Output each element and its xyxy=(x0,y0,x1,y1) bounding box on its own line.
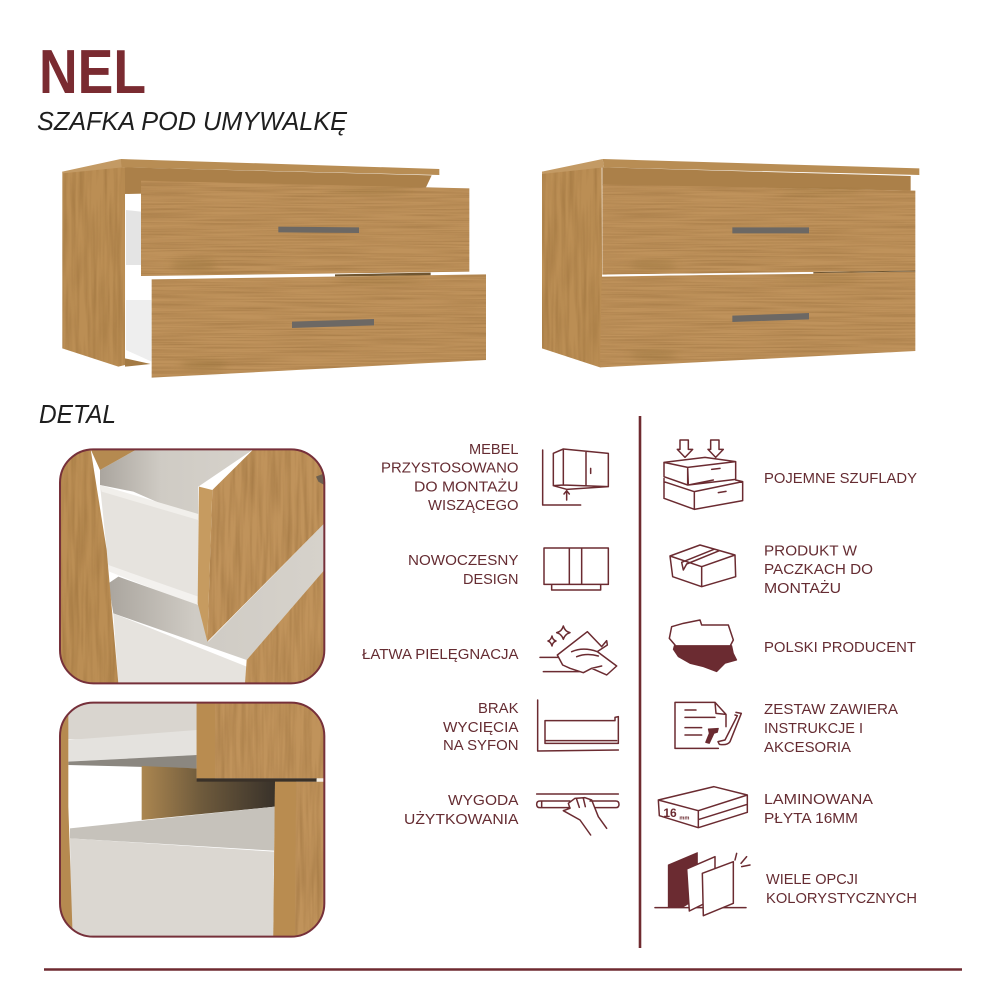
lower drawer front xyxy=(600,272,915,367)
feature: flat-packed xyxy=(670,544,873,597)
feature: wall mounted furniture xyxy=(381,442,608,514)
text: ease of use xyxy=(404,793,519,828)
feature: easy care xyxy=(362,626,617,675)
feature: modern design xyxy=(408,548,608,590)
text: no siphon cut-out: WYCIĘCIA xyxy=(443,720,519,736)
text: flat-packed: PRODUKT W xyxy=(764,544,857,560)
icon: colour samples xyxy=(655,853,750,916)
icon: drawer without cut-out xyxy=(538,700,618,751)
text: flat-packed: MONTAŻU xyxy=(764,579,841,597)
cabinet with closed drawers xyxy=(542,159,919,367)
text: wall mounted: DO MONTAŻU xyxy=(414,478,518,496)
text: polish producer: POLSKI PRODUCENT xyxy=(764,640,916,656)
icon: hand on handle xyxy=(537,794,619,835)
feature: spacious drawers xyxy=(664,440,917,509)
text: 16 mm board: PŁYTA 16MM xyxy=(764,811,858,827)
icon: wall cabinet xyxy=(543,449,608,505)
text: instructions and accessories: INSTRUKCJE I xyxy=(764,721,863,737)
text: spacious drawers: POJEMNE SZUFLADY xyxy=(764,471,917,487)
text: instructions and accessories: ZESTAW ZAWIERA xyxy=(764,702,898,718)
photo panel: drawer gap detail xyxy=(60,703,324,937)
icon: modern cabinet xyxy=(544,548,608,590)
text: modern design: DESIGN xyxy=(463,572,518,588)
title: NEL xyxy=(39,38,146,107)
text: flat-packed xyxy=(764,544,873,597)
text: instructions and accessories: AKCESORIA xyxy=(764,740,851,756)
text: modern design: NOWOCZESNY xyxy=(408,553,519,569)
heading: detal: DETAL xyxy=(39,399,116,429)
upper drawer front xyxy=(602,184,915,275)
text: wall mounted xyxy=(381,442,518,514)
lower drawer front xyxy=(152,274,486,378)
text: flat-packed: PACZKACH DO xyxy=(764,562,873,578)
text: wall mounted: WISZĄCEGO xyxy=(428,498,518,514)
text: many colour options: KOLORYSTYCZNYCH xyxy=(766,891,917,907)
feature: 16 mm board xyxy=(658,787,873,828)
bottom rule xyxy=(44,968,962,971)
vertical divider xyxy=(639,416,641,948)
text: wall mounted: PRZYSTOSOWANO xyxy=(381,460,518,476)
cabinet with open drawers xyxy=(62,159,486,378)
text: no siphon cut-out: NA SYFON xyxy=(443,738,518,754)
feature: ease of use xyxy=(404,793,619,835)
text: wall mounted: MEBEL xyxy=(469,442,518,458)
feature: many colour options xyxy=(655,853,917,916)
icon: laminated board: 16 xyxy=(663,806,677,820)
feature: no siphon cut-out xyxy=(443,700,618,754)
upper drawer front xyxy=(141,181,469,276)
icon: parcel xyxy=(670,545,736,587)
text: many colour options: WIELE OPCJI xyxy=(766,872,858,888)
icon: laminated board: mm xyxy=(679,816,689,822)
text: ease of use: UŻYTKOWANIA xyxy=(404,810,519,828)
text: many colour options xyxy=(766,872,917,907)
text: 16 mm board xyxy=(764,792,873,827)
text: modern design xyxy=(408,553,519,588)
icon: document, screw and handle xyxy=(675,702,741,748)
photo panel: open drawers detail xyxy=(60,449,324,683)
text: 16 mm board: LAMINOWANA xyxy=(764,792,873,808)
icon: laminated board xyxy=(658,787,747,828)
text: easy care: ŁATWA PIELĘGNACJA xyxy=(362,647,519,663)
text: ease of use: WYGODA xyxy=(448,793,519,809)
text: instructions and accessories xyxy=(764,702,898,756)
feature: instructions and accessories xyxy=(675,702,898,756)
icon: wiping hand xyxy=(540,626,617,675)
icon: map of Poland xyxy=(669,620,737,672)
text: no siphon cut-out xyxy=(443,701,519,754)
subtitle: SZAFKA POD UMYWALKĘ xyxy=(37,106,348,136)
feature: polish producer xyxy=(669,620,916,672)
icon: stacked drawers xyxy=(664,440,743,509)
text: no siphon cut-out: BRAK xyxy=(478,701,519,717)
